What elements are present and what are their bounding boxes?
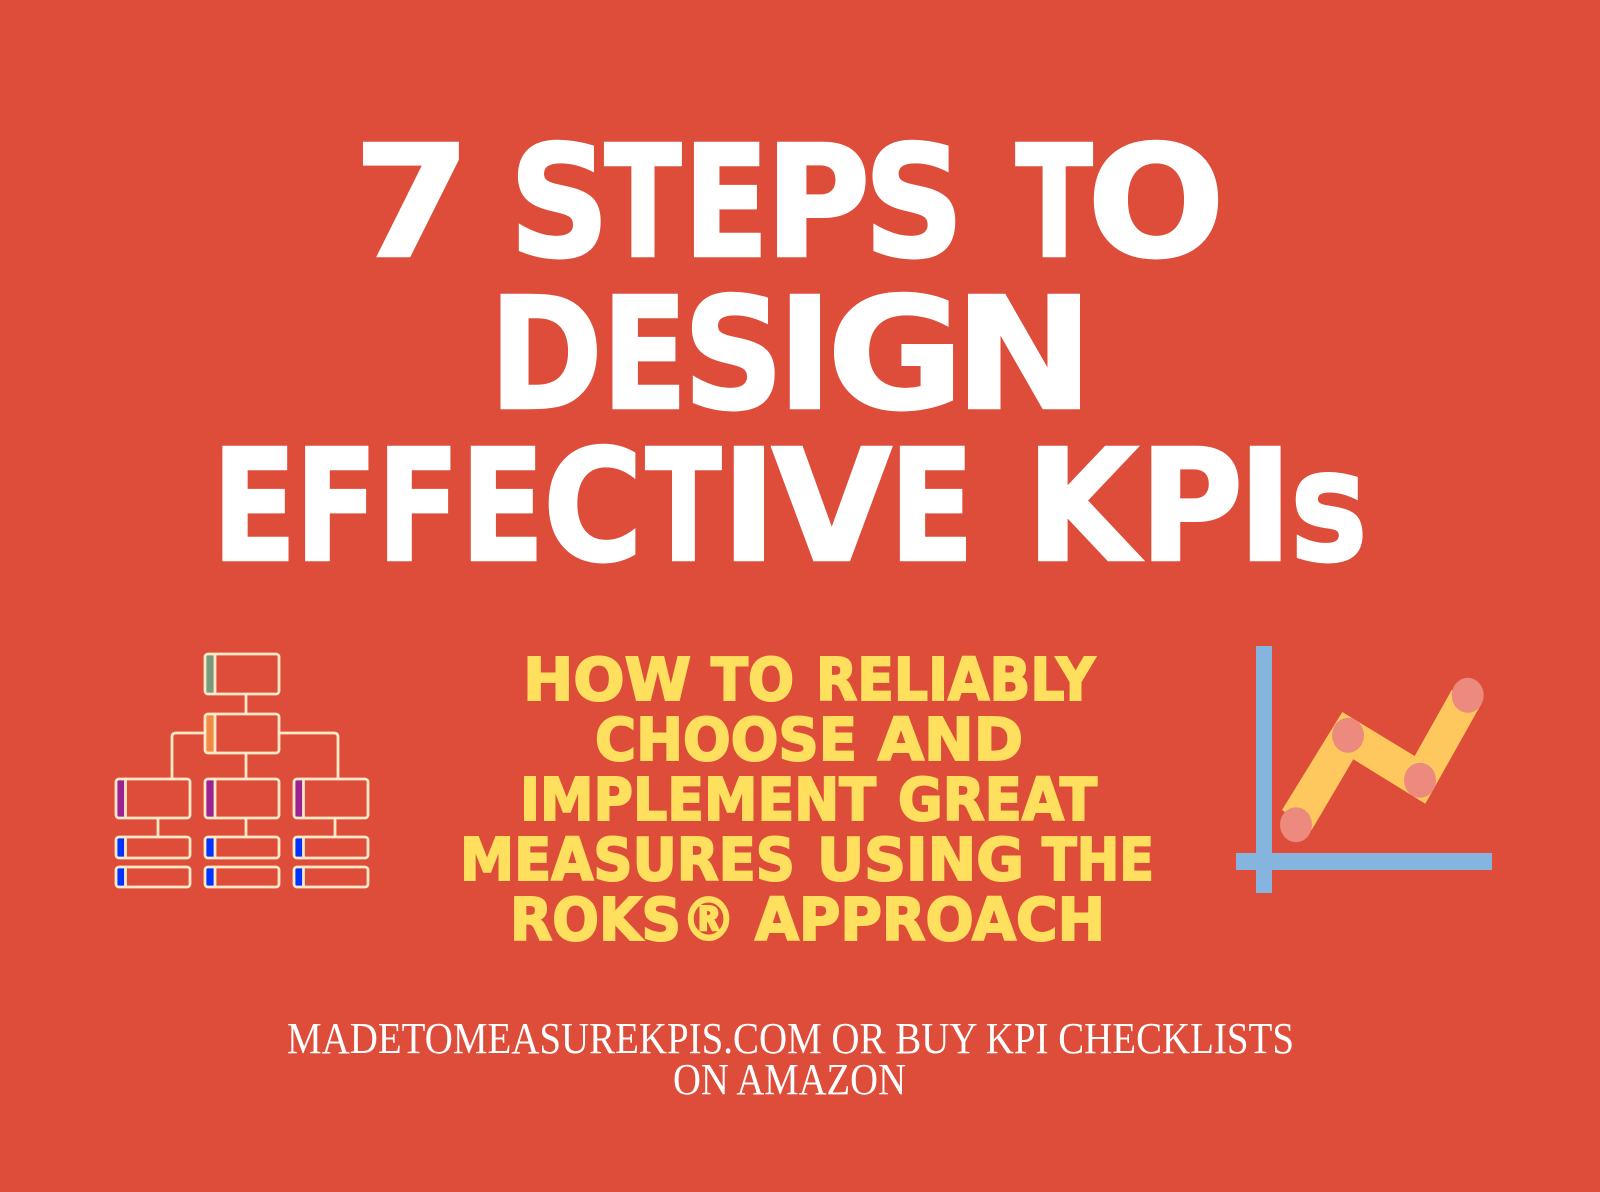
- title: I: [1237, 416, 1293, 597]
- title: T: [1016, 112, 1093, 293]
- title: E: [460, 416, 544, 597]
- icon: organisation chart: [116, 654, 368, 887]
- title: T: [645, 416, 722, 597]
- subtitle: CHOOSE: [595, 705, 857, 774]
- subtitle: MEASURES: [460, 825, 795, 894]
- subtitle: ROKS®: [510, 885, 736, 954]
- subtitle: AND: [878, 705, 1023, 774]
- title: [212, 112, 1368, 597]
- subtitle: THE: [1042, 825, 1154, 894]
- subtitle: RELIABLY: [816, 645, 1096, 714]
- title: S: [683, 264, 784, 445]
- trend line: [1282, 690, 1481, 830]
- chart boxes: [116, 654, 368, 887]
- footer text: ON AMAZON: [673, 1055, 906, 1104]
- title: N: [954, 264, 1094, 445]
- title: K: [1026, 416, 1143, 597]
- chart axes: [1236, 646, 1492, 893]
- connector lines: [158, 695, 338, 836]
- subtitle: GREAT: [898, 765, 1097, 834]
- icon: line chart: [1236, 646, 1492, 893]
- subtitle: TO: [711, 645, 794, 714]
- title: E: [890, 416, 974, 597]
- title: 7: [353, 112, 471, 293]
- title: D: [489, 264, 603, 445]
- title: s: [1290, 416, 1368, 597]
- title: I: [721, 416, 776, 597]
- title: V: [772, 416, 892, 597]
- subtitle: HOW: [523, 645, 691, 714]
- title: T: [604, 112, 682, 293]
- title: E: [212, 416, 297, 597]
- title: S: [509, 112, 610, 293]
- subtitle: APPROACH: [755, 885, 1105, 954]
- title: S: [864, 112, 964, 293]
- footer text: MADETOMEASUREKPIS.COM OR BUY KPI CHECKLISTS: [287, 1014, 1294, 1063]
- footer text: [287, 1014, 1294, 1104]
- colour tabs: [117, 655, 303, 886]
- title: P: [765, 112, 870, 293]
- title: F: [377, 416, 460, 597]
- title: G: [827, 264, 964, 445]
- title: E: [684, 112, 769, 293]
- data points: [1280, 678, 1484, 842]
- subtitle: IMPLEMENT: [520, 765, 876, 834]
- title: P: [1140, 416, 1243, 597]
- title: O: [1087, 112, 1225, 293]
- title: I: [777, 264, 832, 445]
- subtitle: [460, 645, 1154, 954]
- title: F: [295, 416, 378, 597]
- title: C: [543, 416, 643, 597]
- subtitle: USING: [817, 825, 1024, 894]
- title: E: [602, 264, 687, 445]
